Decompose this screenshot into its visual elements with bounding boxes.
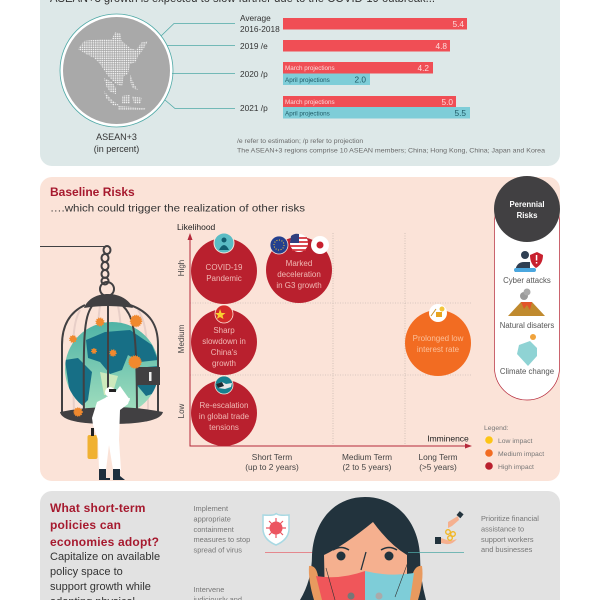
icon: volcano <box>508 288 545 316</box>
icon: melting iceberg <box>517 334 537 366</box>
heading: baseline risks: Baseline Risks <box>50 185 135 199</box>
connector: red <box>265 552 322 554</box>
row: 2021: April projections <box>285 110 330 118</box>
row: 2021: March projections <box>285 99 335 106</box>
bubble: G3 <box>266 234 332 303</box>
panel: perennial risks <box>494 176 560 400</box>
bubble: COVID-19: COVID-19 <box>206 263 243 272</box>
axes <box>190 238 470 446</box>
bubble: trade tensions: in global trade <box>199 412 250 421</box>
cage lock <box>137 367 160 385</box>
legend: Medium impact <box>498 451 544 458</box>
policy: containment: spread of virus <box>194 546 242 554</box>
row: 2020: 4.2 <box>417 63 429 73</box>
panel: perennial risks: Cyber attacks <box>503 276 551 285</box>
map caption: ASEAN+3 <box>96 132 137 142</box>
x axis labels: Imminence <box>427 434 469 444</box>
x axis labels: (>5 years) <box>419 462 457 472</box>
policy: containment: containment <box>194 525 234 534</box>
row: 2021: 2021 /p <box>240 103 268 113</box>
panel: perennial risks: Perennial <box>509 200 545 209</box>
policy: intervene <box>192 585 242 600</box>
map: ASEAN+3 region <box>60 14 173 127</box>
bubble: COVID-19: Pandemic <box>206 274 242 283</box>
footnotes: The ASEAN+3 regions comprise 10 ASEAN members; China; Hong Kong, China; Japan and Korea <box>237 148 545 154</box>
bubble: G3: deceleration <box>277 270 321 279</box>
subheading: ….which could trigger the realization of other risks <box>50 202 305 214</box>
policy: financial assistance <box>481 514 539 554</box>
bubble: COVID-19 <box>191 233 257 304</box>
person in protective suit <box>88 386 130 480</box>
policy: financial assistance: support workers <box>481 535 534 544</box>
body text <box>50 551 160 600</box>
row: 2020: 2020 /p <box>240 69 268 79</box>
bubble: G3: in G3 growth <box>276 281 322 290</box>
x axis labels: Short Term <box>252 452 292 462</box>
footnotes <box>237 138 545 154</box>
legend: High impact <box>498 464 534 471</box>
back cage bars <box>73 306 148 420</box>
row: average 2016-2018: 5.4 <box>452 19 464 29</box>
policy: containment <box>194 504 250 554</box>
policy: containment: measures to stop <box>194 535 250 544</box>
row: 2019 <box>240 40 450 52</box>
panel: short-term policies <box>40 491 560 600</box>
policy: containment: appropriate <box>194 514 231 524</box>
row: 2019: 2019 /e <box>240 41 268 51</box>
heading: policies question: economies adopt? <box>50 535 159 549</box>
legend <box>484 425 544 471</box>
flag: Japan <box>311 236 329 254</box>
bubble: China: growth <box>212 359 236 368</box>
row: 2020: March projections <box>285 65 335 72</box>
y axis labels: Medium <box>177 324 186 353</box>
x axis labels: Medium Term <box>342 452 392 462</box>
x axis labels: (2 to 5 years) <box>343 462 392 472</box>
bubble: low interest rate <box>405 304 471 376</box>
virus particles <box>70 316 142 416</box>
bubble: China <box>191 305 257 375</box>
bubble: trade tensions <box>191 376 257 446</box>
policy: financial assistance: and businesses <box>481 545 533 554</box>
row: average 2016-2018: 2016-2018 <box>240 24 280 34</box>
globe <box>65 322 159 416</box>
row: 2020 <box>240 62 433 85</box>
row: average 2016-2018: Average <box>240 13 271 23</box>
footnotes: /e refer to estimation; /p refer to projection <box>237 138 363 145</box>
risk matrix <box>177 222 472 472</box>
icon: cyber attacks <box>514 251 543 272</box>
illustration: caged globe <box>40 246 163 480</box>
policy: financial assistance: Prioritize financial <box>481 514 539 523</box>
body text: Capitalize on available <box>50 551 160 563</box>
panel: ASEAN+3 growth <box>40 0 560 166</box>
heading: policies question: policies can <box>50 518 121 532</box>
policy: containment: Implement <box>194 504 228 513</box>
grid <box>190 233 472 446</box>
x axis labels <box>245 434 469 472</box>
row: average 2016-2018 <box>240 13 467 34</box>
row: 2021: 5.0 <box>441 97 453 107</box>
bubble: low interest rate: Prolonged low <box>413 334 464 343</box>
y axis labels: Low <box>177 403 186 418</box>
mask: red puzzle half <box>316 571 365 600</box>
bubble: trade tensions: tensions <box>209 423 239 432</box>
connector: teal <box>408 552 464 554</box>
flag: US <box>290 234 308 252</box>
icon: financial assistance <box>435 511 464 544</box>
body text: policy space to <box>50 566 123 578</box>
heading: policies question <box>50 501 159 549</box>
x axis labels: (up to 2 years) <box>245 462 299 472</box>
row: 2020: 2.0 <box>354 74 366 84</box>
mask: blue puzzle half <box>365 571 414 600</box>
bubble: China: China's <box>211 348 237 357</box>
legend: Low impact <box>498 438 532 445</box>
panel: perennial risks: Natural disaters <box>500 321 554 330</box>
body text: support growth while <box>50 581 151 593</box>
x axis labels: Long Term <box>418 452 458 462</box>
legend: Legend: <box>484 425 509 432</box>
row: 2020: April projections <box>285 77 330 84</box>
policy: intervene: Intervene <box>194 585 224 594</box>
bubble: trade tensions: Re-escalation <box>200 401 248 410</box>
row: 2021: 5.5 <box>454 108 466 118</box>
y axis labels <box>177 222 216 418</box>
flag: EU <box>270 236 288 254</box>
heading: policies question: What short-term <box>50 501 146 515</box>
y axis labels: Likelihood <box>177 222 216 232</box>
row: 2021 <box>240 96 470 118</box>
illustration: woman in puzzle mask <box>300 497 426 600</box>
y axis labels: High <box>177 260 186 276</box>
connector lines <box>161 24 235 108</box>
row: 2019: 4.8 <box>435 41 447 51</box>
panel: ASEAN+3 growth: (in percent) <box>94 144 139 154</box>
policy: financial assistance: assistance to <box>481 524 524 534</box>
panel: perennial risks: Climate change <box>500 367 554 376</box>
bubble: China: slowdown in <box>202 337 246 346</box>
panel: perennial risks: Risks <box>517 211 538 220</box>
bubble: G3: Marked <box>286 259 312 268</box>
bubble: China: Sharp <box>213 326 235 335</box>
bubble: low interest rate: interest rate <box>417 345 460 354</box>
bar chart <box>240 13 470 118</box>
cage bars <box>62 305 158 422</box>
eyes <box>333 548 397 570</box>
icon: virus shield <box>263 513 289 545</box>
panel: baseline risks <box>40 176 560 481</box>
